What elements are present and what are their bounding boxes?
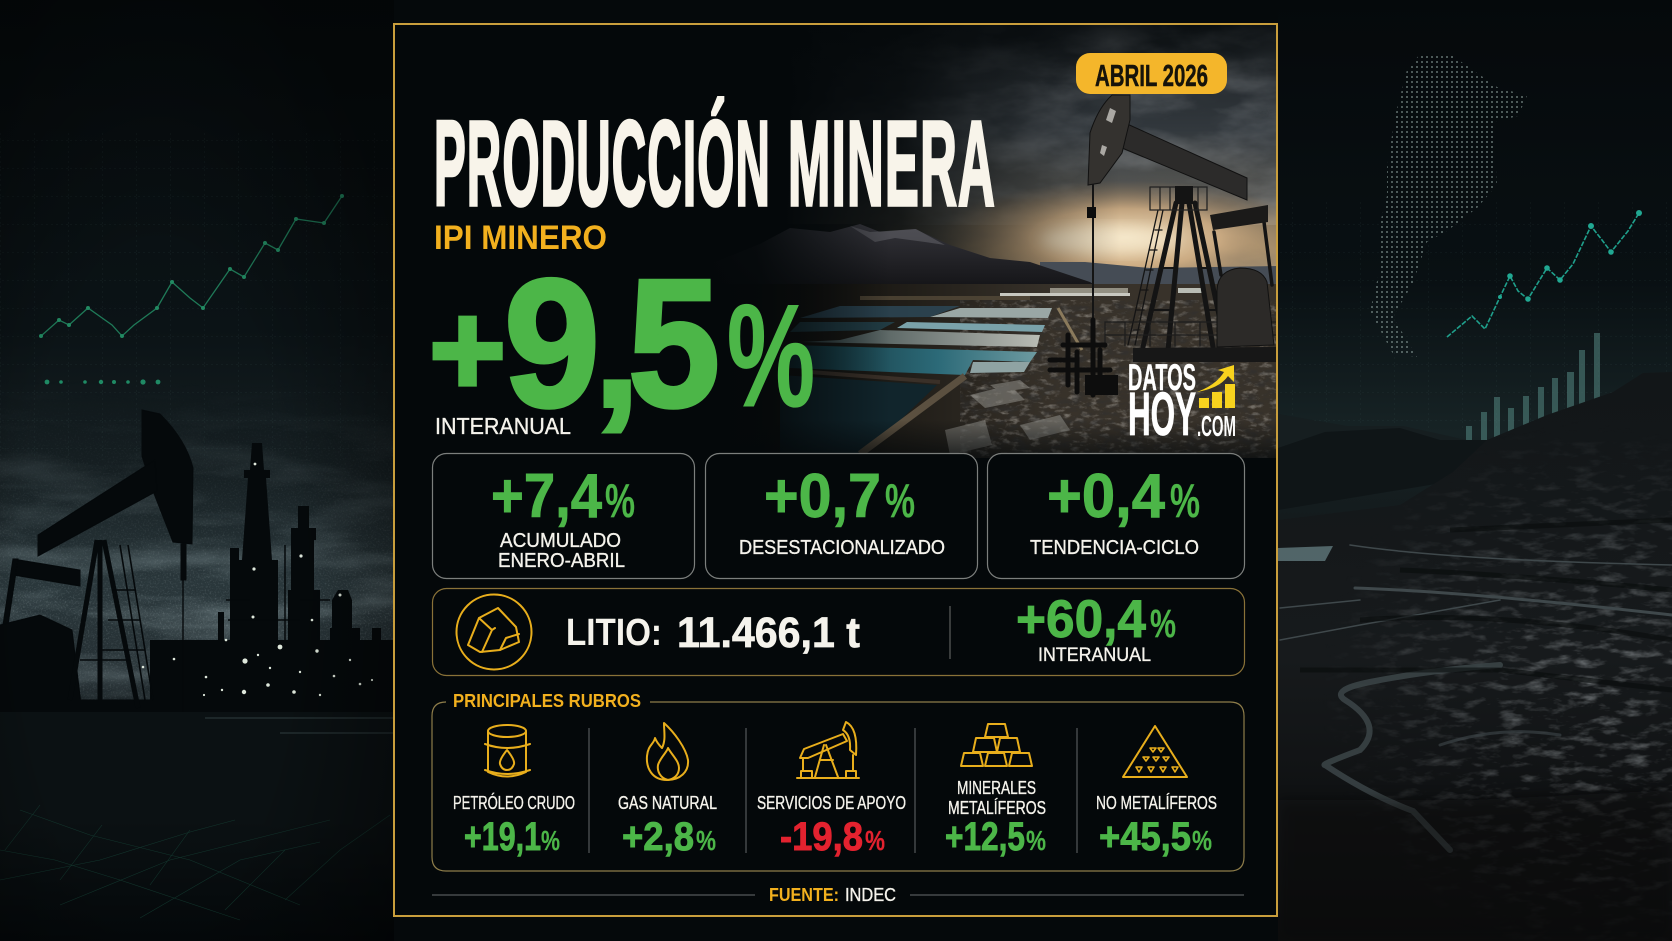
item: gas natural: % (696, 825, 716, 856)
pumpjack silhouette left (0, 410, 193, 724)
icon: mineral pyramid (1123, 726, 1187, 777)
logo: Datos Hoy .com (1128, 357, 1236, 448)
item: servicios de apoyo: -19,8 (780, 815, 863, 859)
card: acumulado: % (605, 474, 635, 527)
item: no metalíferos: NO METALÍFEROS (1096, 793, 1217, 813)
item: minerales metalíferos: METALÍFEROS (948, 798, 1046, 818)
card: desestacionalizado: DESESTACIONALIZADO (739, 537, 945, 559)
decorative salt patches (945, 380, 1070, 455)
chart: right teal line and bars (1447, 210, 1642, 446)
item: petróleo crudo: % (541, 825, 560, 856)
photo: salt flat, mountains and pumpjack (774, 25, 1276, 458)
item: minerales metalíferos (945, 724, 1046, 859)
badge: date (1076, 53, 1227, 94)
logo: Datos Hoy .com: HOY (1128, 380, 1196, 448)
chart: left green line (39, 194, 344, 385)
icon: lithium rock (456, 594, 532, 670)
card: acumulado: +7,4 (491, 462, 602, 531)
icon: gold bars (961, 724, 1032, 766)
item: no metalíferos: % (1192, 825, 1212, 856)
dotted map of Argentina (1370, 54, 1527, 357)
subtitle: IPI MINERO (434, 219, 607, 257)
decorative digital grid on ground (0, 805, 390, 920)
panel: litio (432, 588, 1244, 676)
card: desestacionalizado: +0,7 (764, 462, 881, 531)
panel: left background with oil pumpjack and refinery (0, 133, 393, 920)
card: tendencia-ciclo (988, 454, 1244, 578)
card: desestacionalizado (706, 454, 978, 578)
icon: flame (647, 723, 688, 780)
panel: main frame: MINERA (788, 95, 996, 231)
main figure: +9,5%: % (727, 274, 815, 437)
card: tendencia-ciclo: TENDENCIA-CICLO (1030, 537, 1199, 559)
item: no metalíferos (1096, 726, 1217, 859)
icon: oil barrel (485, 725, 530, 776)
footer: source: FUENTE: (769, 885, 839, 905)
panel: litio: INTERANUAL (1038, 645, 1151, 666)
item: gas natural: +2,8 (622, 815, 694, 859)
card: acumulado: ACUMULADO (500, 530, 621, 552)
main figure: +9,5%: , (594, 257, 640, 441)
panel: litio: LITIO: (566, 612, 662, 654)
logo: Datos Hoy .com: DATOS (1128, 357, 1196, 398)
item: minerales metalíferos: % (1026, 825, 1046, 856)
panel: principales rubros: PRINCIPALES RUBROS (453, 691, 641, 711)
panel: right background with open pit mine and dotted map (1278, 0, 1672, 941)
label: interanual: INTERANUAL (435, 413, 571, 439)
card: tendencia-ciclo: +0,4 (1047, 462, 1165, 531)
main figure: +9,5%: 9 (504, 241, 600, 445)
item: gas natural: GAS NATURAL (618, 793, 717, 813)
item: servicios de apoyo: SERVICIOS DE APOYO (757, 793, 906, 813)
item: petróleo crudo: +19,1 (464, 815, 541, 859)
title: PRODUCCIÓN (434, 95, 771, 231)
item: servicios de apoyo: % (865, 825, 885, 856)
main figure: +9,5%: + (429, 276, 506, 423)
item: petróleo crudo (453, 725, 575, 859)
item: gas natural (618, 723, 717, 859)
badge: date: ABRIL 2026 (1095, 58, 1208, 93)
item: no metalíferos: +45,5 (1099, 815, 1191, 859)
card: desestacionalizado: % (885, 474, 915, 527)
panel: litio: +60,4 (1016, 590, 1147, 649)
distant hills (1280, 418, 1394, 428)
main figure: +9,5%: 5 (628, 241, 720, 445)
item: minerales metalíferos: +12,5 (945, 815, 1025, 859)
panel: litio: 11.466,1 t (677, 609, 860, 657)
card: tendencia-ciclo: % (1170, 474, 1200, 527)
icon: pumpjack (797, 722, 859, 778)
item: minerales metalíferos: MINERALES (957, 778, 1036, 798)
item: petróleo crudo: PETRÓLEO CRUDO (453, 792, 575, 813)
footer: source: INDEC (845, 885, 896, 905)
panel: principales rubros (432, 691, 1244, 871)
footer: source (432, 885, 1244, 905)
panel: main frame (394, 24, 1277, 916)
item: servicios de apoyo (757, 722, 906, 859)
logo: Datos Hoy .com: .COM (1197, 411, 1236, 443)
refinery silhouette (142, 443, 394, 716)
icon: pumpjack in photo (1050, 95, 1276, 395)
card: acumulado (432, 454, 694, 578)
card: acumulado: ENERO-ABRIL (498, 550, 625, 572)
mine terrain with terraces and roads (1278, 360, 1672, 941)
panel: litio: % (1150, 602, 1176, 646)
